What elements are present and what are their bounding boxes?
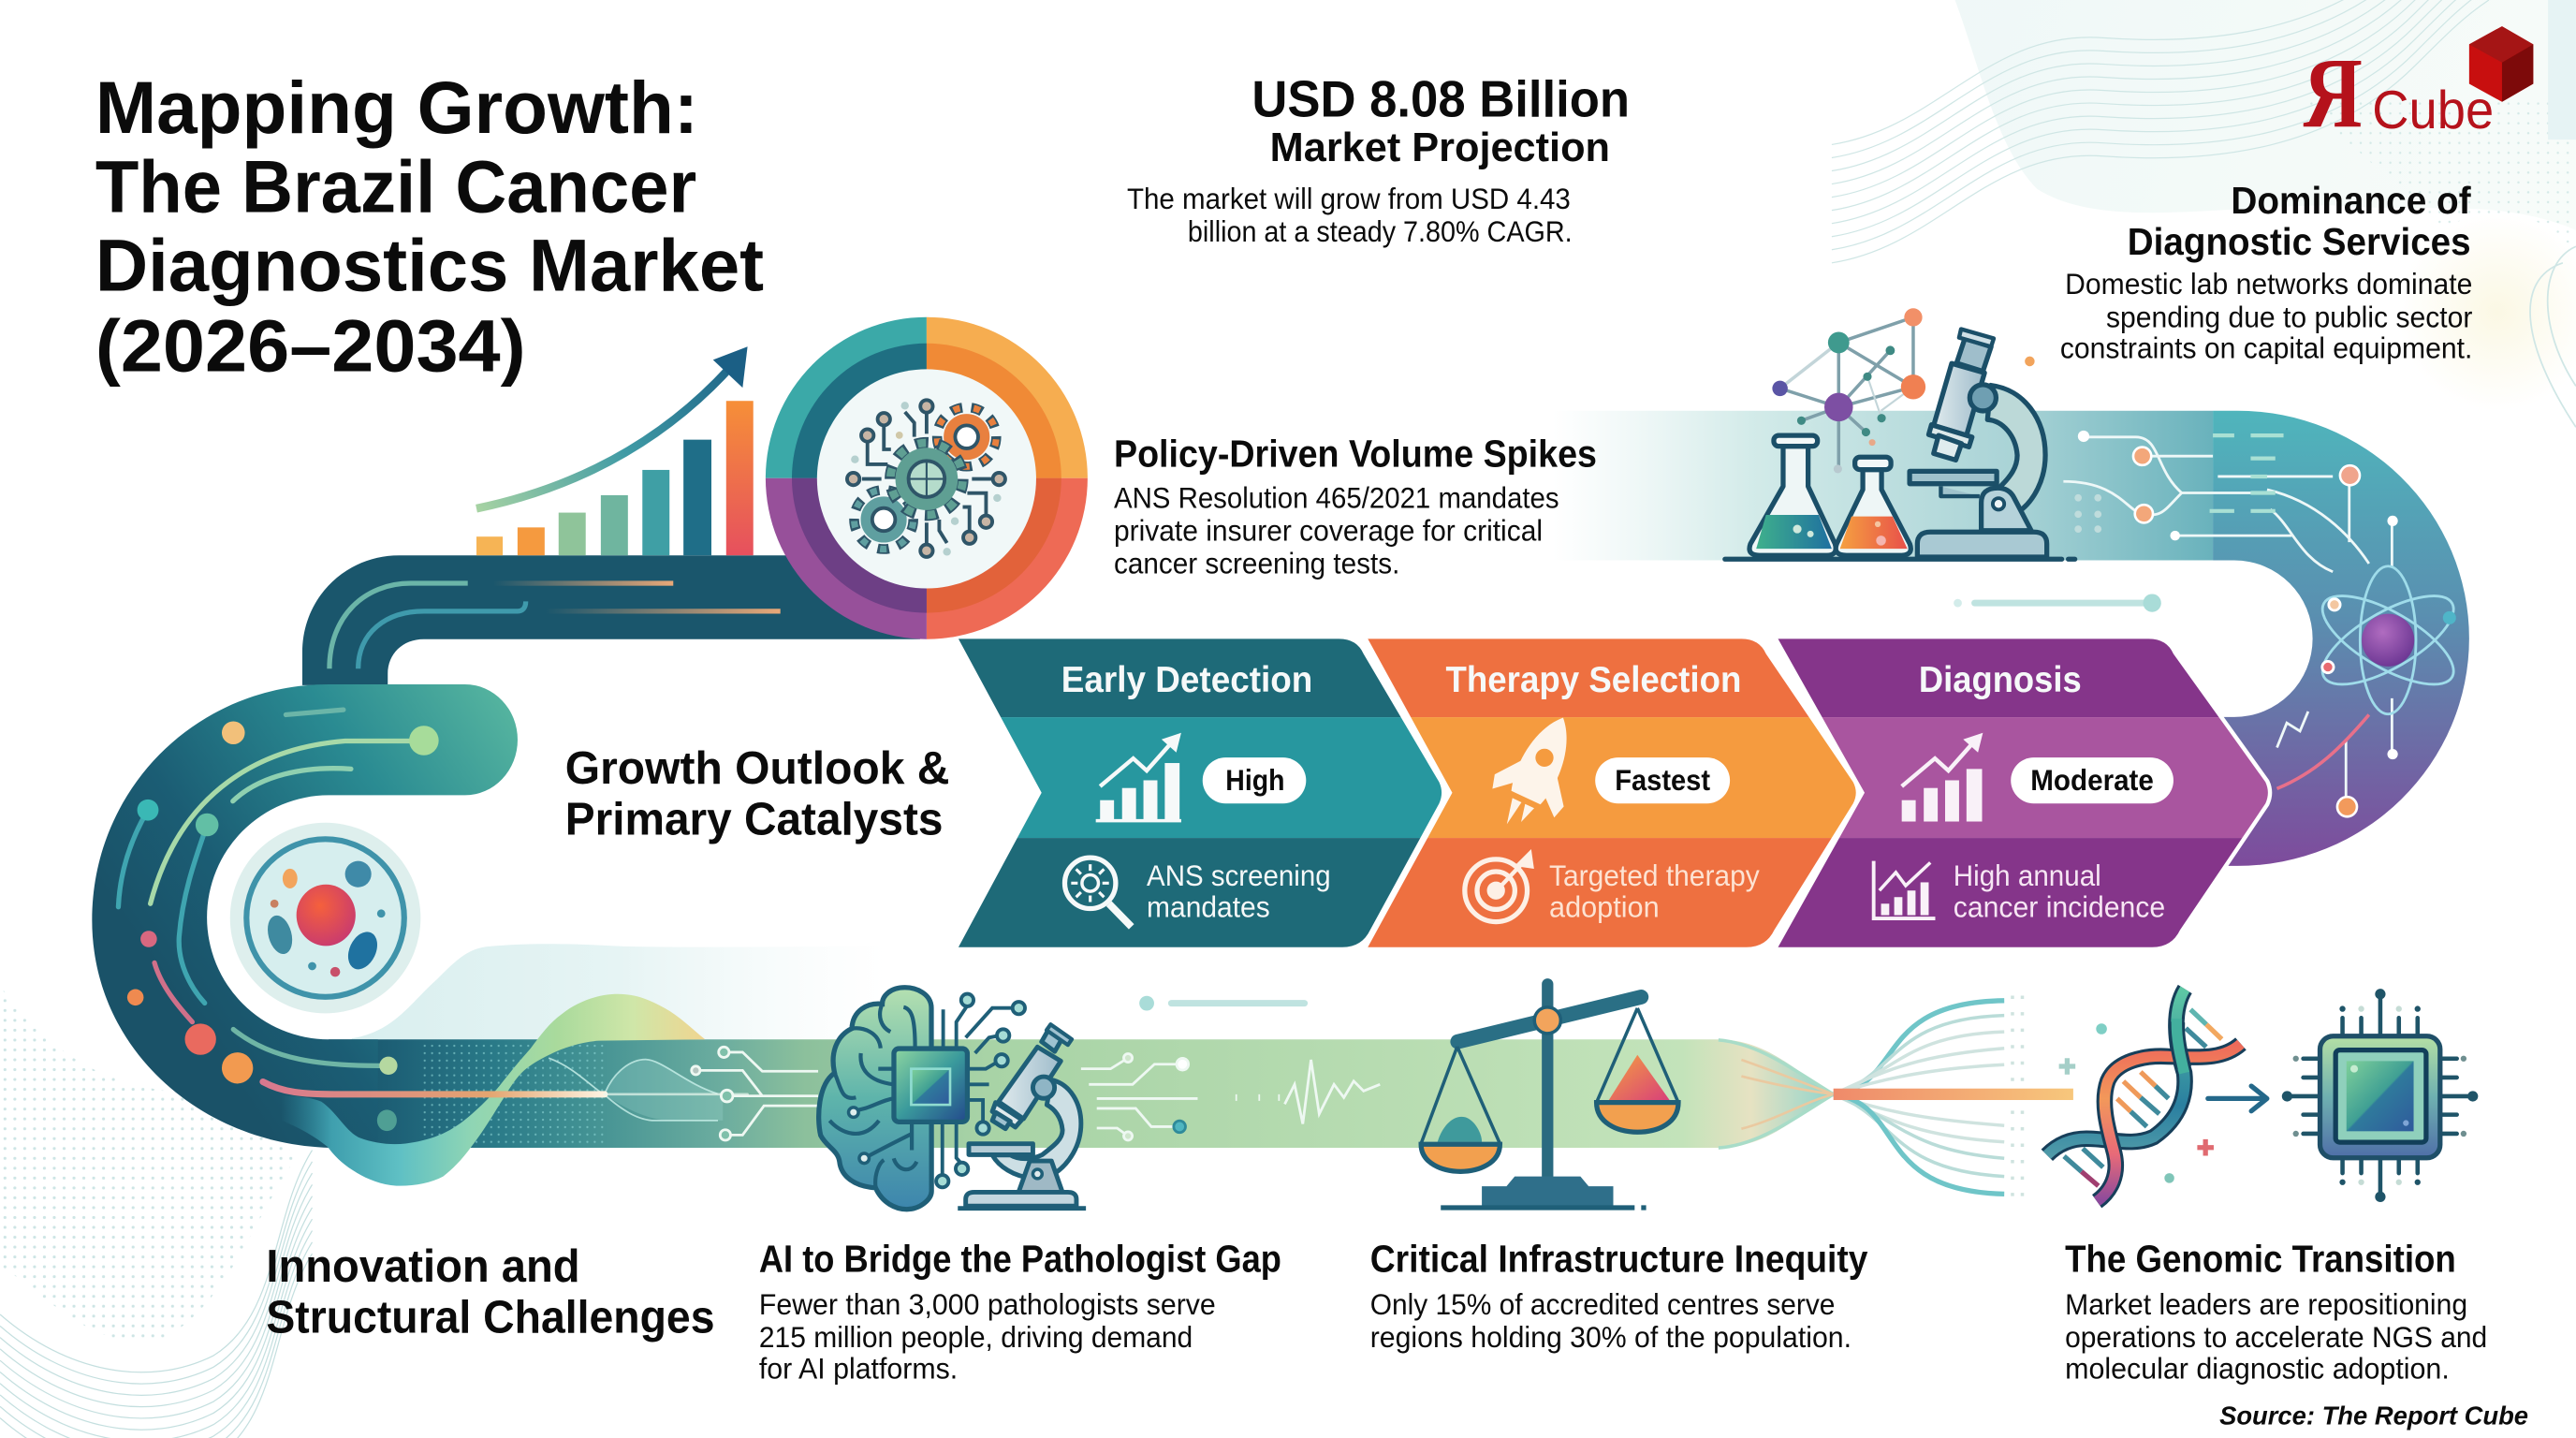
chip core [894, 1049, 967, 1122]
text: genomic transition: Market leaders are repositioning [2065, 1287, 2467, 1321]
logo: RCube [2304, 26, 2533, 149]
icon: balance scale [1421, 984, 1678, 1208]
text: genomic transition [2065, 1237, 2487, 1385]
bar chart with arrow [476, 346, 754, 555]
text: infrastructure inequity: Only 15% of accredited centres serve [1370, 1287, 1835, 1321]
section heading: policy text: Policy-Driven Volume Spikes [1114, 432, 1597, 475]
title: The Brazil Cancer [95, 145, 696, 227]
dominance of diagnostic services text: Diagnostic Services [2128, 220, 2471, 263]
text: AI pathologist gap: Fewer than 3,000 pathologists serve [759, 1287, 1216, 1321]
chevron: early detection: mandates [1147, 889, 1270, 923]
market projection callout: billion at a steady 7.80% CAGR. [1188, 214, 1573, 248]
growth outlook heading: Primary Catalysts [565, 795, 943, 845]
section heading: policy text: private insurer coverage for critical [1114, 513, 1543, 547]
icon: magnifier [1064, 858, 1132, 927]
heading: innovation: Innovation and [266, 1241, 580, 1292]
dominance of diagnostic services text: Dominance of [2231, 179, 2471, 222]
title: (2026–2034) [95, 305, 526, 388]
pill: moderate: Moderate [2030, 763, 2154, 797]
icon: microscope top [1725, 330, 2075, 559]
arrow [2208, 1086, 2267, 1111]
ribbon wave [281, 994, 705, 1186]
pill: moderate [2011, 757, 2174, 803]
source note: Source: The Report Cube [2219, 1401, 2528, 1431]
chevron: therapy selection: adoption [1549, 889, 1660, 923]
dominance of diagnostic services text: constraints on capital equipment. [2060, 331, 2472, 365]
connector line above band [1139, 996, 1308, 1011]
icon: growth chart [1902, 733, 1983, 822]
text: AI pathologist gap: AI to Bridge the Pathologist Gap [759, 1237, 1281, 1280]
text: genomic transition: operations to accelerate NGS and [2065, 1320, 2487, 1354]
icon: flasks [1749, 435, 1910, 555]
growth outlook heading: Growth Outlook & [565, 743, 949, 794]
market projection callout: USD 8.08 Billion [1251, 71, 1630, 128]
chevron: therapy selection [1364, 638, 1865, 948]
icon: microchip [2282, 989, 2478, 1202]
icon: atom [2310, 566, 2466, 714]
text: AI pathologist gap [759, 1237, 1281, 1385]
growth outlook heading [565, 743, 949, 845]
section heading: policy text: cancer screening tests. [1114, 547, 1399, 580]
circuit lines on band [2063, 435, 2392, 807]
pill: fastest [1595, 757, 1730, 803]
chevron: diagnosis: cancer incidence [1954, 889, 2165, 923]
chevron: diagnosis: High annual [1954, 858, 2101, 892]
chevron: therapy selection: Therapy Selection [1445, 660, 1741, 700]
circuits around brain [692, 1047, 1380, 1140]
chevron: diagnosis: Diagnosis [1919, 660, 2082, 700]
section heading: policy text [1114, 432, 1597, 580]
heading: innovation [266, 1241, 714, 1343]
growth arrow [476, 365, 733, 508]
title [95, 66, 764, 388]
upper dark pipeline [302, 555, 920, 685]
icon: growth chart [1096, 733, 1181, 822]
icon: brain chip [819, 988, 1025, 1210]
heading: innovation: Structural Challenges [266, 1292, 714, 1343]
text: AI pathologist gap: 215 million people, driving demand [759, 1320, 1193, 1354]
chevron: therapy selection: Targeted therapy [1549, 858, 1760, 892]
top-right pipeline band [1553, 411, 2469, 866]
icon: rocket [1478, 701, 1598, 843]
band nodes [2074, 431, 2398, 816]
icon: gears and circuit [847, 400, 1005, 557]
icon: analytics chart [1874, 861, 1935, 918]
dark C-shaped pipeline [92, 684, 518, 1148]
market projection callout: The market will grow from USD 4.43 [1127, 182, 1571, 215]
dominance of diagnostic services text: Domestic lab networks dominate [2065, 267, 2472, 301]
logo: RCube: Я [2304, 38, 2363, 149]
text: infrastructure inequity [1370, 1237, 1868, 1354]
chevron: diagnosis [1774, 638, 2276, 948]
circular gear emblem [766, 317, 1088, 639]
text: genomic transition: The Genomic Transition [2065, 1237, 2456, 1280]
pipeline lines and nodes [118, 710, 748, 1094]
chevron: early detection: ANS screening [1147, 858, 1331, 892]
text: genomic transition: molecular diagnostic adoption. [2065, 1351, 2450, 1385]
dominance of diagnostic services text [2060, 179, 2472, 365]
signal fan [1719, 996, 2073, 1199]
title: Mapping Growth: [95, 66, 698, 149]
title: Diagnostics Market [95, 225, 764, 307]
icon: DNA helix [2047, 990, 2241, 1201]
text: AI pathologist gap: for AI platforms. [759, 1351, 958, 1385]
text: infrastructure inequity: Critical Infrastructure Inequity [1370, 1237, 1868, 1280]
pill: high [1203, 757, 1306, 803]
icon: target [1465, 855, 1531, 922]
pill: fastest: Fastest [1615, 763, 1710, 797]
market projection callout [1127, 71, 1630, 248]
pale inner wave [549, 1056, 723, 1121]
chevron: early detection [953, 638, 1445, 948]
dominance of diagnostic services text: spending due to public sector [2106, 300, 2472, 333]
chevron: early detection: Early Detection [1061, 660, 1312, 700]
chip traces [936, 994, 1025, 1187]
icon: network molecule [1772, 308, 2035, 473]
icon: cell [230, 823, 420, 1013]
small connector line [1954, 594, 2161, 612]
lower pipeline band [92, 684, 1834, 1186]
section heading: policy text: ANS Resolution 465/2021 mandates [1114, 480, 1559, 514]
logo: RCube: Cube [2372, 81, 2494, 140]
text: infrastructure inequity: regions holding 30% of the population. [1370, 1320, 1852, 1354]
pill: high: High [1225, 763, 1284, 797]
market projection callout: Market Projection [1270, 125, 1610, 170]
helix rungs [2064, 1009, 2222, 1186]
icon: microscope lower [958, 1024, 1086, 1209]
